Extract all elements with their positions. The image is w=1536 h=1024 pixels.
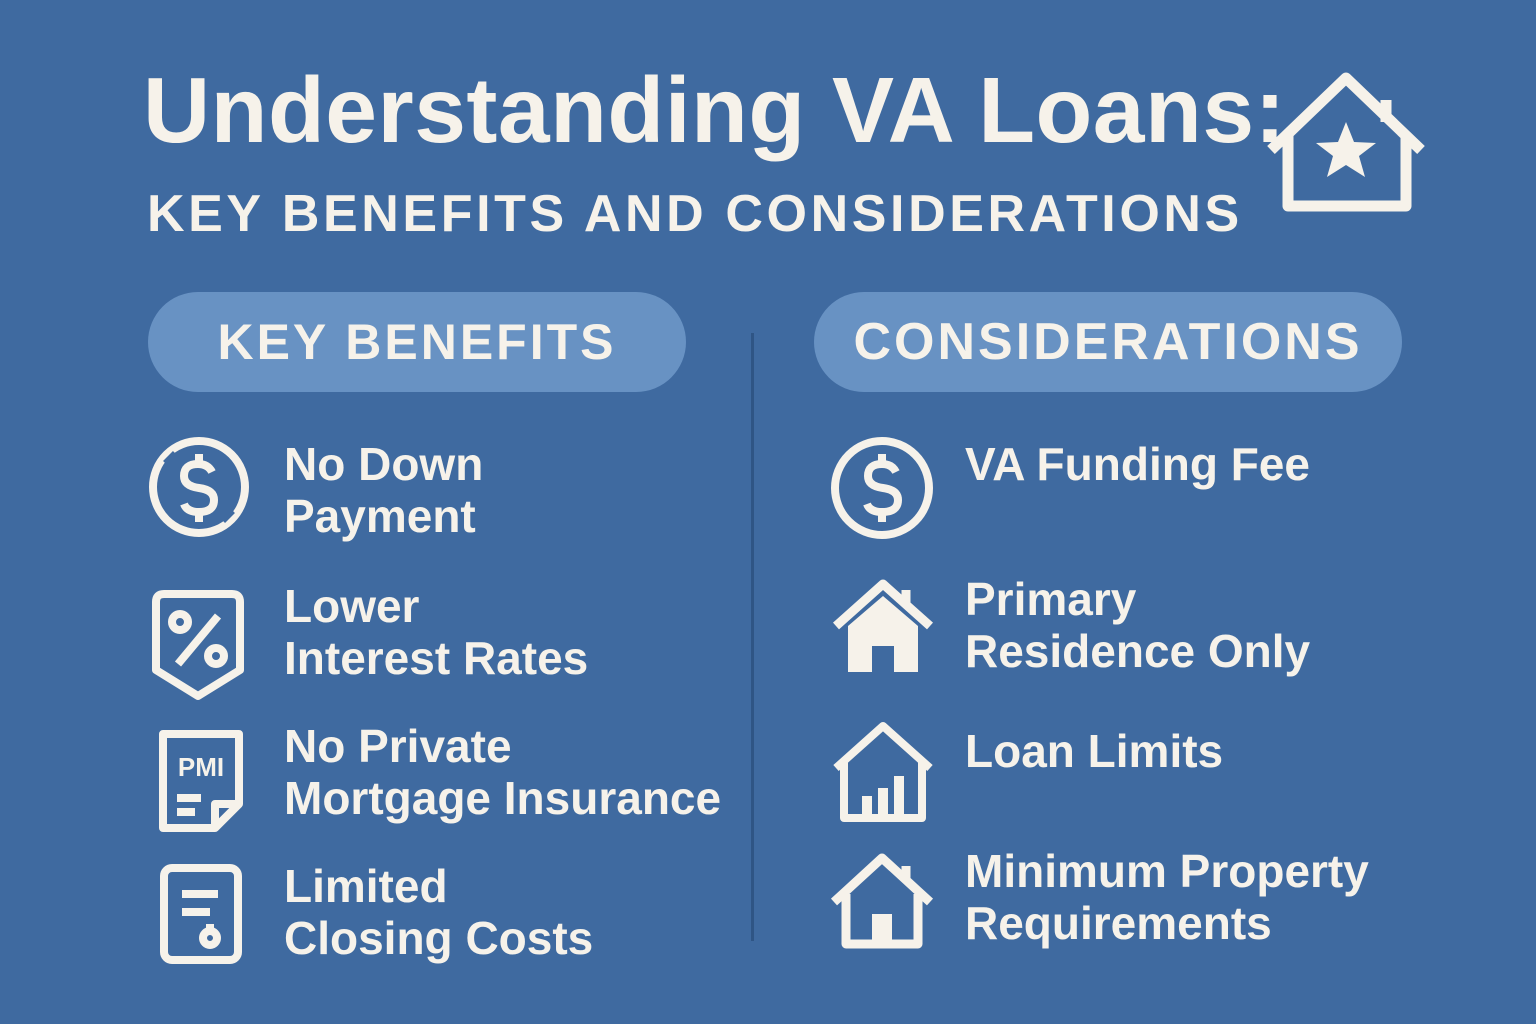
icon: percent tag	[152, 590, 244, 700]
text: limited closing costs: Limited	[284, 860, 448, 912]
icon: house	[833, 580, 933, 672]
text: no down payment: Payment	[284, 490, 476, 542]
text: no down payment: No Down	[284, 438, 483, 490]
icon: dollar circle slashed	[149, 437, 249, 537]
text: minimum property requirements	[965, 845, 1369, 949]
pill: considerations	[814, 292, 1402, 392]
text: no down payment	[284, 438, 483, 542]
icon: house with star	[1267, 72, 1425, 212]
text: lower interest rates	[284, 580, 588, 684]
text: no private mortgage insurance	[284, 720, 721, 824]
icon: PMI document	[159, 730, 243, 832]
text: lower interest rates: Lower	[284, 580, 419, 632]
text: minimum property requirements: Minimum Property	[965, 845, 1369, 897]
text: primary residence only: Residence Only	[965, 625, 1310, 677]
icon: PMI document: PMI	[178, 752, 224, 782]
text: limited closing costs: Closing Costs	[284, 912, 593, 964]
pill: considerations: CONSIDERATIONS	[853, 313, 1363, 371]
text: no private mortgage insurance: No Private	[284, 720, 512, 772]
pill: key benefits: KEY BENEFITS	[217, 314, 617, 370]
text: no private mortgage insurance: Mortgage Insurance	[284, 772, 721, 824]
text: VA funding fee: VA Funding Fee	[965, 438, 1310, 490]
text: primary residence only	[965, 573, 1310, 677]
text: loan limits: Loan Limits	[965, 725, 1223, 777]
icon: document	[160, 864, 242, 964]
title: Understanding VA Loans:	[143, 58, 1286, 162]
subtitle: KEY BENEFITS AND CONSIDERATIONS	[147, 185, 1243, 243]
pill: key benefits	[148, 292, 686, 392]
text: lower interest rates: Interest Rates	[284, 632, 588, 684]
icon: house outline	[831, 854, 933, 948]
text: minimum property requirements: Requirements	[965, 897, 1272, 949]
text: primary residence only: Primary	[965, 573, 1136, 625]
text: limited closing costs	[284, 860, 593, 964]
icon: dollar circle	[831, 437, 933, 539]
icon: house with chart	[833, 722, 933, 822]
